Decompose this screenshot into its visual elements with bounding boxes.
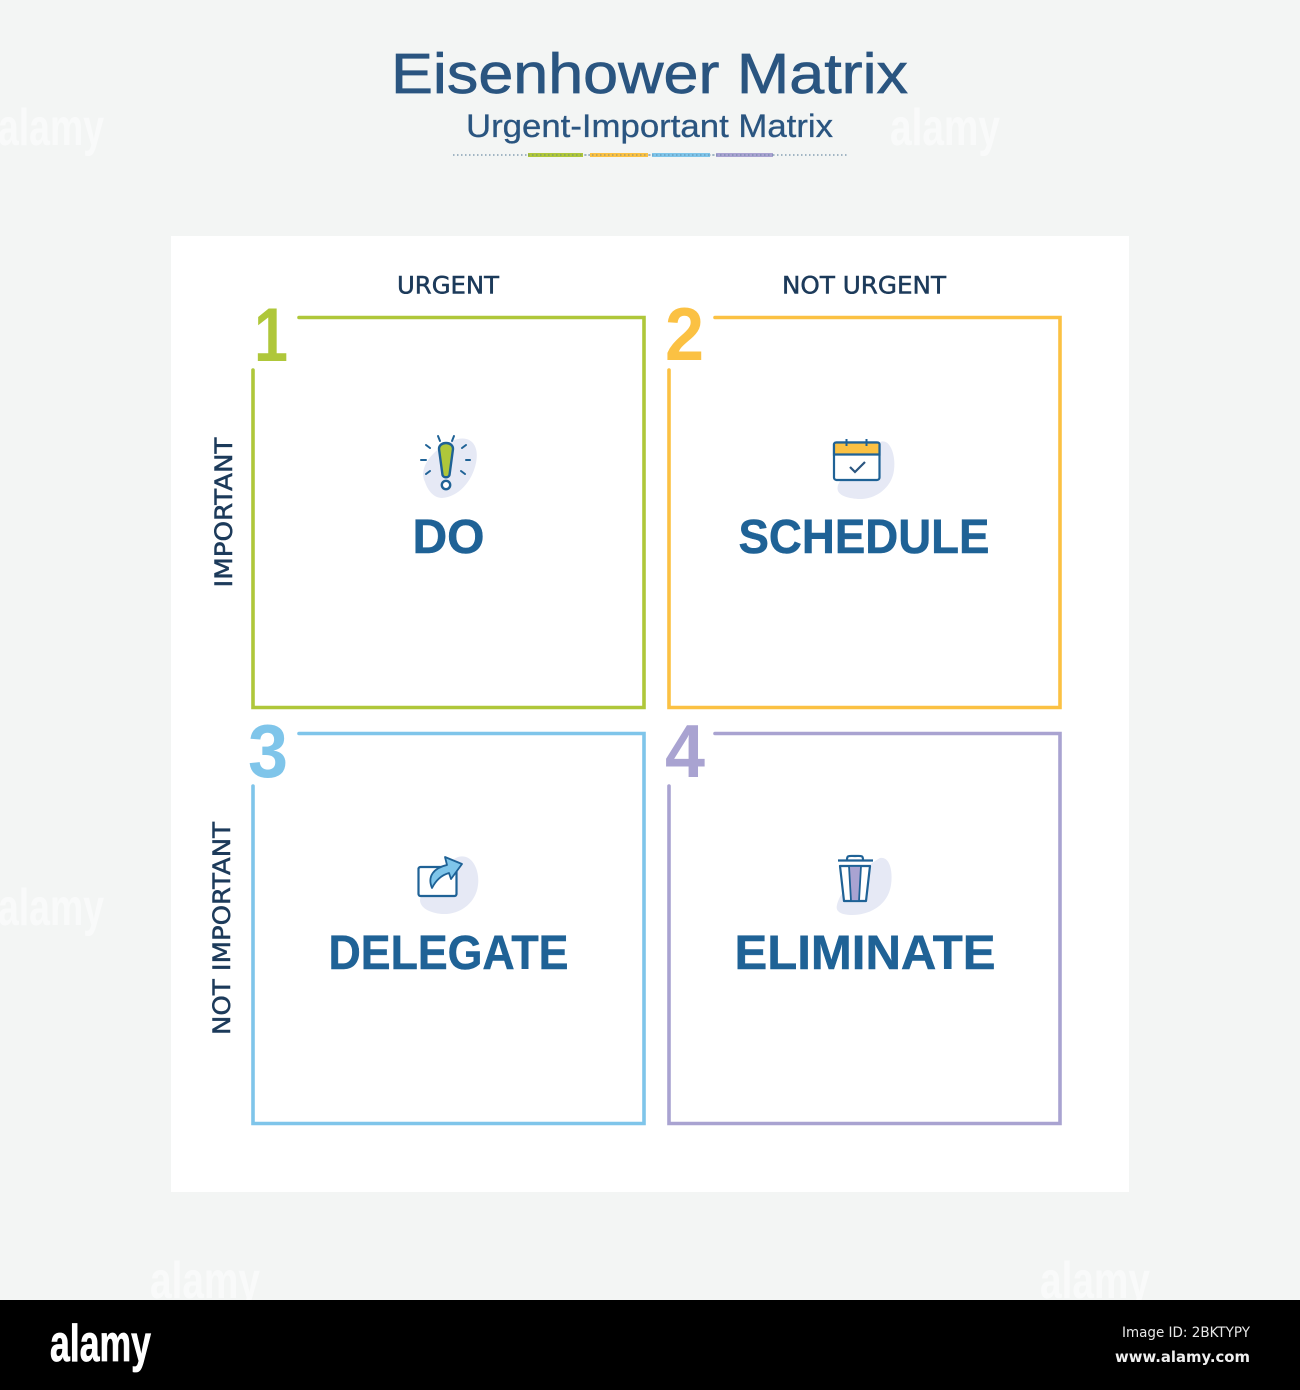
column label: not urgent: NOT URGENT: [782, 272, 946, 300]
icon: calendar: [834, 439, 894, 499]
row label: not important: NOT IMPORTANT: [208, 822, 236, 1035]
footer logo: alamy: [50, 1315, 151, 1373]
label: do: DO: [412, 511, 484, 564]
quadrant 2: schedule: [665, 292, 1060, 708]
icon: exclamation: [421, 436, 477, 498]
frame: [669, 318, 1060, 708]
text: alamy: [890, 99, 1000, 157]
column label: urgent: URGENT: [397, 272, 499, 300]
quadrant 3: delegate: [248, 709, 644, 1124]
frame: [253, 318, 644, 708]
text: alamy: [0, 879, 104, 937]
footer bar: [0, 1300, 1300, 1390]
frame: [669, 734, 1060, 1124]
frame: [253, 734, 644, 1124]
text: alamy: [150, 1252, 260, 1310]
number 2: 2: [665, 292, 704, 376]
text: alamy: [1040, 1252, 1150, 1310]
label: eliminate: ELIMINATE: [734, 927, 996, 980]
number 4: 4: [665, 709, 705, 793]
icon: share arrow: [418, 856, 478, 914]
number 3: 3: [248, 709, 288, 793]
label: delegate: DELEGATE: [328, 927, 568, 980]
title divider: [453, 153, 847, 157]
quadrant 1: do: [253, 293, 644, 708]
row label: important: IMPORTANT: [210, 437, 238, 588]
label: schedule: SCHEDULE: [738, 511, 990, 564]
website: www.alamy.com: [1115, 1348, 1250, 1366]
panel: matrix: [171, 236, 1129, 1192]
number 1: 1: [254, 293, 288, 378]
text: alamy: [0, 99, 104, 157]
quadrant 4: eliminate: [665, 709, 1060, 1124]
subtitle: Urgent-Important Matrix: [466, 108, 833, 144]
icon: trash can: [837, 856, 892, 915]
title: Eisenhower Matrix: [391, 42, 908, 106]
image id: Image ID: 2BKTYPY: [1122, 1325, 1250, 1341]
